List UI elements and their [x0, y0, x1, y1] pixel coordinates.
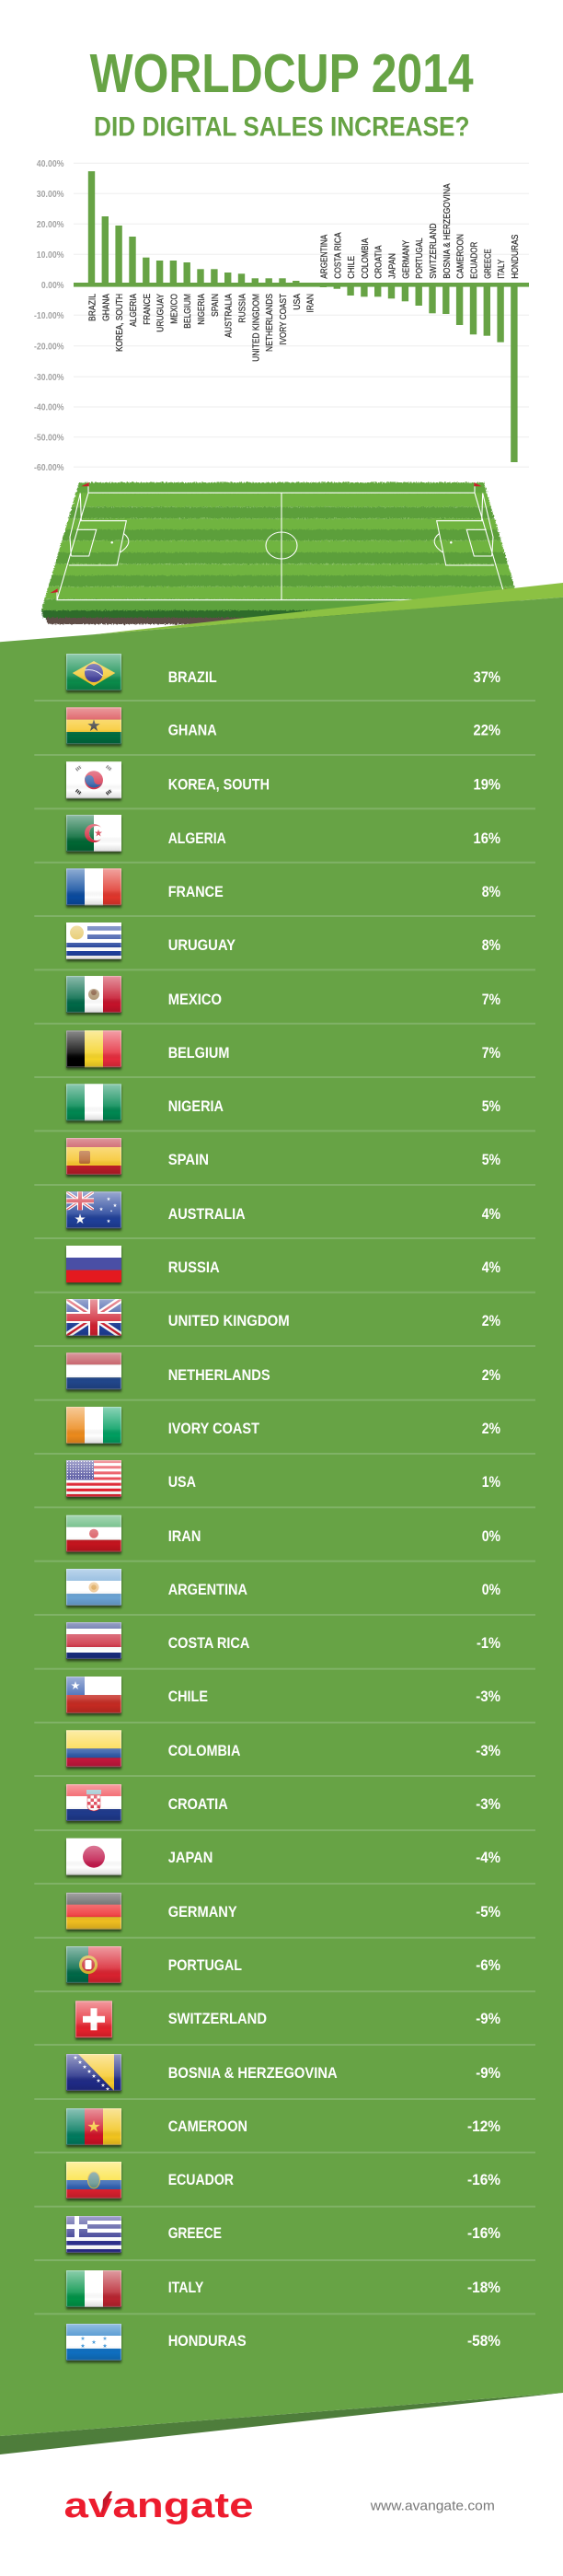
pitch grass	[37, 479, 526, 624]
flag: Germany	[66, 1893, 121, 1932]
row: Ivory Coast: IVORY COAST	[168, 1420, 260, 1437]
y axis labels	[34, 159, 64, 473]
row: Korea, South: 19%	[473, 775, 500, 793]
row: USA: 1%	[482, 1473, 500, 1491]
rotated country labels: positive: URUGUAY	[155, 294, 167, 332]
illustration: football pitch	[37, 479, 526, 624]
flag: Brazil	[66, 654, 121, 692]
rotated country labels: positive: MEXICO	[168, 294, 179, 324]
rotated country labels: positive: NETHERLANDS	[264, 294, 275, 352]
bar chart: digital sales by country	[34, 159, 529, 473]
row: Portugal: PORTUGAL	[168, 1956, 242, 1974]
row: Costa Rica: COSTA RICA	[168, 1634, 249, 1652]
row: Australia: AUSTRALIA	[168, 1205, 246, 1223]
icon: check mark in logo	[102, 2491, 112, 2515]
rotated country labels: positive: USA	[292, 294, 303, 310]
flag: Argentina	[66, 1569, 121, 1607]
row: Germany: GERMANY	[168, 1903, 237, 1920]
flag: Nigeria	[66, 1084, 121, 1123]
row: Belgium	[66, 1030, 500, 1070]
row: Ivory Coast	[66, 1407, 500, 1445]
row: Ecuador	[66, 2162, 500, 2200]
row: Russia	[66, 1246, 500, 1285]
rotated country labels: negative: CROATIA	[373, 245, 385, 279]
row: Germany	[66, 1893, 500, 1932]
rotated country labels: negative: ARGENTINA	[318, 235, 329, 279]
rotated country labels: positive: IVORY COAST	[278, 294, 289, 345]
row: Argentina: ARGENTINA	[168, 1581, 247, 1598]
rotated country labels: negative: CHILE	[346, 256, 357, 279]
row: Italy: -18%	[467, 2279, 500, 2296]
flag: Costa Rica	[66, 1622, 121, 1661]
flag: Spain	[66, 1138, 121, 1177]
panel: country results	[0, 598, 563, 2436]
row: Croatia: -3%	[476, 1795, 500, 1813]
flag: Portugal	[66, 1946, 121, 1985]
row: Japan: -4%	[476, 1849, 500, 1866]
rotated country labels: positive: ALGERIA	[128, 294, 139, 327]
row: Korea, South	[66, 761, 500, 801]
flag: Croatia	[66, 1784, 121, 1823]
row: Ghana	[66, 707, 500, 747]
flag: Ivory Coast	[66, 1407, 121, 1445]
rotated country labels: positive: IRAN	[305, 294, 316, 313]
rotated country labels: negative: COLOMBIA	[360, 238, 371, 279]
flag: United Kingdom	[66, 1299, 121, 1339]
row: Chile: -3%	[476, 1688, 500, 1705]
row: Russia: RUSSIA	[168, 1259, 220, 1276]
row: Ghana: GHANA	[168, 721, 217, 738]
row: Colombia: COLOMBIA	[168, 1742, 240, 1759]
flag: Chile	[66, 1677, 121, 1716]
row: Iran: IRAN	[168, 1527, 201, 1545]
row: Ecuador: -16%	[467, 2171, 500, 2188]
row: Ecuador: ECUADOR	[168, 2171, 234, 2188]
flag: France	[66, 868, 121, 908]
row: Italy: ITALY	[168, 2279, 204, 2296]
flag: Cameroon	[66, 2108, 121, 2147]
row: Colombia	[66, 1730, 500, 1770]
rotated country labels: positive	[86, 294, 316, 362]
flag: Bosnia and Herzegovina	[66, 2054, 121, 2094]
pitch markings	[50, 482, 513, 600]
row: Switzerland: -9%	[476, 2010, 500, 2027]
y axis labels: -10.00%	[34, 311, 64, 321]
flag: Greece	[66, 2216, 121, 2256]
row: Nigeria	[66, 1084, 500, 1123]
row: Mexico: MEXICO	[168, 991, 222, 1008]
flag: Colombia	[66, 1730, 121, 1770]
rotated country labels: negative	[318, 183, 521, 279]
row: Japan: JAPAN	[168, 1849, 213, 1866]
y axis labels: -40.00%	[34, 403, 64, 413]
rotated country labels: negative: PORTUGAL	[414, 238, 425, 279]
row: Algeria: 16%	[473, 830, 500, 847]
flag: Ecuador	[66, 2162, 121, 2200]
row: Spain: SPAIN	[168, 1151, 209, 1168]
rotated country labels: negative: HONDURAS	[510, 235, 521, 279]
row: USA	[66, 1460, 500, 1499]
subtitle: DID DIGITAL SALES INCREASE?	[94, 112, 469, 143]
flag: USA	[66, 1460, 121, 1499]
website url: www.avangate.com	[370, 2499, 495, 2514]
rotated country labels: positive: AUSTRALIA	[224, 294, 235, 338]
flag: Japan	[66, 1839, 121, 1877]
row: Algeria	[66, 815, 500, 854]
row: Nigeria: 5%	[482, 1097, 500, 1115]
flag: South Korea	[66, 761, 121, 801]
rotated country labels: positive: NIGERIA	[196, 294, 207, 325]
y axis labels: -30.00%	[34, 373, 64, 383]
row: Greece: GREECE	[168, 2224, 222, 2242]
row: Switzerland: SWITZERLAND	[168, 2010, 267, 2027]
y axis labels: -50.00%	[34, 433, 64, 443]
rotated country labels: positive: RUSSIA	[237, 294, 248, 323]
row: Australia	[66, 1191, 500, 1231]
flag: Ghana	[66, 707, 121, 747]
row: Bosnia & Herzegovina: BOSNIA & HERZEGOVINA	[168, 2064, 338, 2082]
rotated country labels: negative: GREECE	[482, 249, 493, 279]
row: France	[66, 868, 500, 908]
row: Iran	[66, 1515, 500, 1554]
row: Cameroon: -12%	[467, 2118, 500, 2135]
y axis labels: 40.00%	[37, 159, 64, 169]
row: Colombia: -3%	[476, 1742, 500, 1759]
row: Brazil: 37%	[473, 668, 500, 686]
flag: Russia	[66, 1246, 121, 1285]
row: Germany: -5%	[476, 1903, 500, 1920]
row: Croatia	[66, 1784, 500, 1823]
row: Belgium: BELGIUM	[168, 1044, 229, 1062]
rotated country labels: negative: CAMEROON	[455, 234, 466, 279]
y axis labels: -20.00%	[34, 342, 64, 352]
dark green bottom wedge	[0, 2393, 563, 2454]
rotated country labels: positive: BELGIUM	[182, 294, 193, 329]
row: Chile: CHILE	[168, 1688, 208, 1705]
row: Korea, South: KOREA, SOUTH	[168, 775, 270, 793]
row: Costa Rica	[66, 1622, 500, 1661]
row: Greece	[66, 2216, 500, 2256]
row: Uruguay	[66, 922, 500, 961]
row: Croatia: CROATIA	[168, 1795, 228, 1813]
row: Belgium: 7%	[482, 1044, 500, 1062]
row: Mexico	[66, 976, 500, 1015]
row: Italy	[66, 2270, 500, 2309]
row: Switzerland	[75, 2001, 500, 2040]
row: France: FRANCE	[168, 883, 224, 900]
row: Spain: 5%	[482, 1151, 500, 1168]
flag: Algeria	[66, 815, 121, 854]
row: Algeria: ALGERIA	[168, 830, 226, 847]
flag: Italy	[66, 2270, 121, 2309]
y axis labels: -60.00%	[34, 463, 64, 473]
row: Bosnia & Herzegovina: -9%	[476, 2064, 500, 2082]
row: Honduras: -58%	[467, 2332, 500, 2350]
row: Spain	[66, 1138, 500, 1177]
row: United Kingdom: 2%	[482, 1312, 500, 1329]
row: Russia: 4%	[482, 1259, 500, 1276]
row: Honduras: HONDURAS	[168, 2332, 247, 2350]
row: Ghana: 22%	[473, 721, 500, 738]
row: Uruguay: URUGUAY	[168, 936, 236, 954]
row: Bosnia & Herzegovina	[66, 2054, 500, 2094]
rotated country labels: positive: FRANCE	[142, 294, 153, 325]
row: United Kingdom: UNITED KINGDOM	[168, 1312, 290, 1329]
row: France: 8%	[482, 883, 500, 900]
rotated country labels: positive: SPAIN	[210, 294, 221, 317]
rotated country labels: negative: ECUADOR	[469, 241, 480, 279]
row: Brazil: BRAZIL	[168, 668, 217, 686]
bars	[74, 171, 529, 462]
rotated country labels: positive: GHANA	[100, 294, 111, 321]
row: United Kingdom	[66, 1299, 500, 1339]
row: Argentina: 0%	[482, 1581, 500, 1598]
rotated country labels: positive: UNITED KINGDOM	[250, 294, 261, 362]
rotated country labels: negative: COSTA RICA	[332, 232, 343, 279]
rotated country labels: negative: GERMANY	[400, 240, 411, 279]
flag: Netherlands	[66, 1352, 121, 1392]
rotated country labels: positive: BRAZIL	[86, 294, 98, 321]
flag: Belgium	[66, 1030, 121, 1070]
row: Portugal: -6%	[476, 1956, 500, 1974]
rotated country labels: negative: SWITZERLAND	[428, 223, 439, 279]
row: Portugal	[66, 1946, 500, 1985]
row separators are decorative	[34, 700, 535, 2315]
row: Cameroon	[66, 2108, 500, 2147]
rotated country labels: positive: KOREA, SOUTH	[114, 294, 125, 352]
row: Iran: 0%	[482, 1527, 500, 1545]
row: Costa Rica: -1%	[477, 1634, 500, 1652]
row: Australia: 4%	[482, 1205, 500, 1223]
row: Argentina	[66, 1569, 500, 1607]
row: Greece: -16%	[467, 2224, 500, 2242]
row: Netherlands: NETHERLANDS	[168, 1366, 270, 1384]
row: Mexico: 7%	[482, 991, 500, 1008]
flag: Iran	[66, 1515, 121, 1554]
rotated country labels: negative: JAPAN	[386, 253, 397, 279]
row: Honduras	[66, 2324, 500, 2362]
row: Uruguay: 8%	[482, 936, 500, 954]
rotated country labels: negative: ITALY	[496, 260, 507, 279]
title: WORLDCUP 2014	[90, 43, 474, 104]
row: Chile	[66, 1677, 500, 1716]
y axis labels: 30.00%	[37, 190, 64, 200]
y axis labels: 0.00%	[41, 281, 64, 291]
green accent wedge	[92, 583, 563, 634]
flag: Mexico	[66, 976, 121, 1015]
row: Nigeria: NIGERIA	[168, 1097, 224, 1115]
row: Ivory Coast: 2%	[482, 1420, 500, 1437]
flag: Australia	[66, 1191, 121, 1231]
flag: Switzerland	[75, 2001, 112, 2040]
row: Brazil	[66, 654, 500, 692]
row: Cameroon: CAMEROON	[168, 2118, 247, 2135]
rotated country labels: negative: BOSNIA & HERZEGOVINA	[442, 183, 453, 279]
logo: avangate: avangate	[64, 2487, 254, 2525]
row: USA: USA	[168, 1473, 196, 1491]
row: Netherlands	[66, 1352, 500, 1392]
flag: Honduras	[66, 2324, 121, 2362]
flag: Uruguay	[66, 922, 121, 961]
y axis labels: 20.00%	[37, 220, 64, 230]
row: Japan	[66, 1839, 500, 1877]
row: Netherlands: 2%	[482, 1366, 500, 1384]
y axis labels: 10.00%	[37, 250, 64, 261]
